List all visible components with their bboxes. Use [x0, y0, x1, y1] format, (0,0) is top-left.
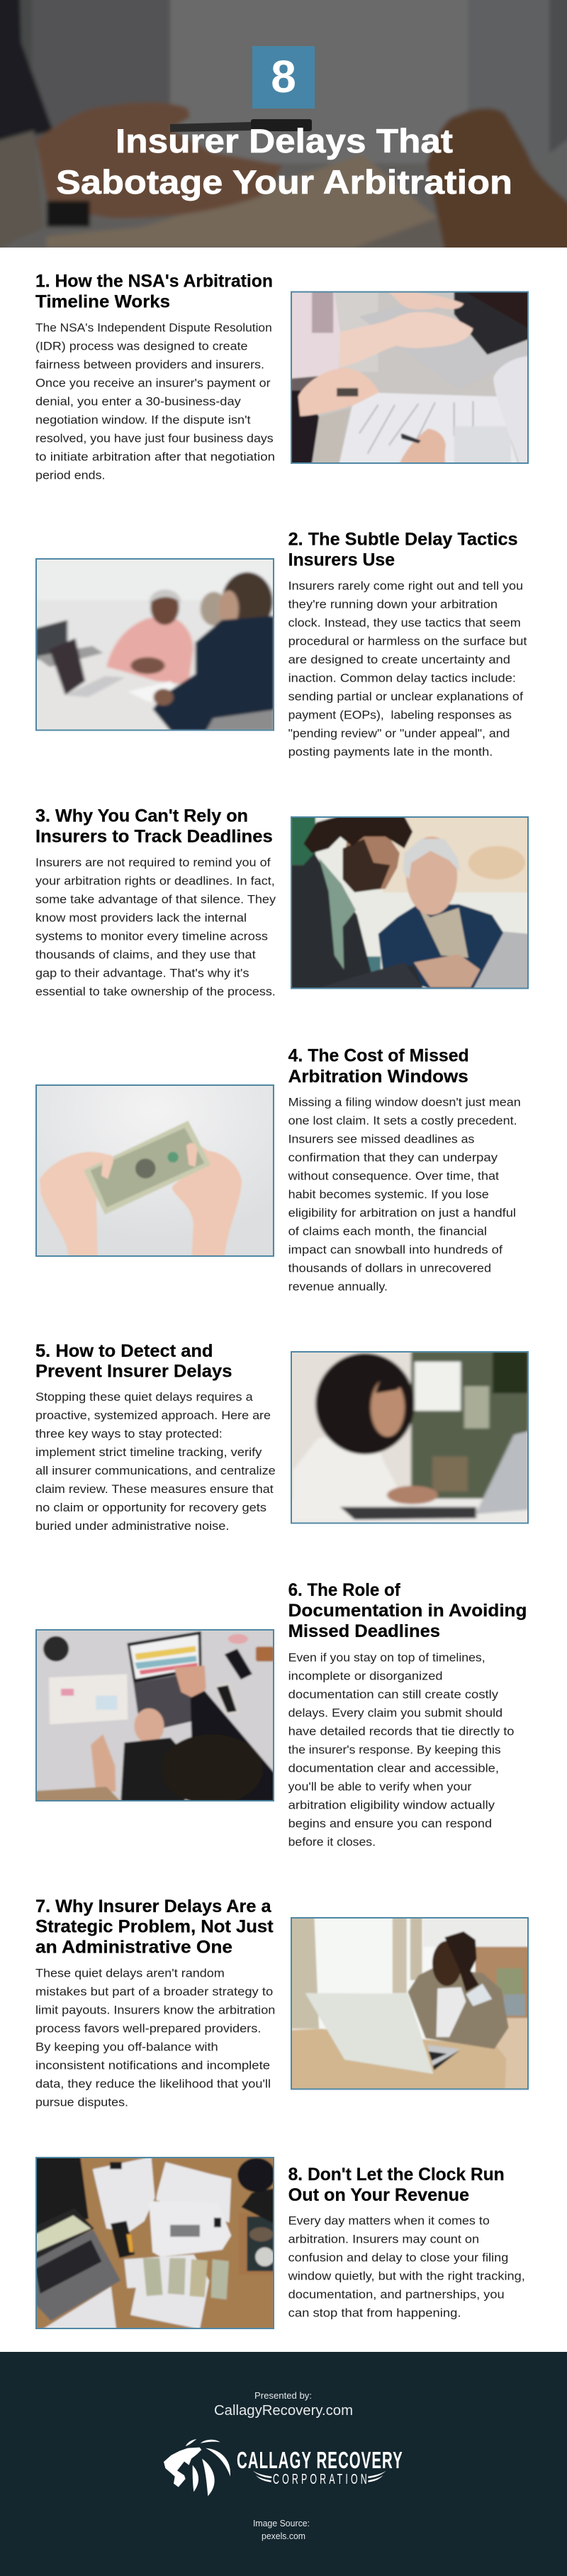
body text 4 — [288, 1097, 521, 1294]
heading 6: 6. The Role of — [288, 1580, 400, 1600]
body text 8 — [287, 2215, 525, 2320]
title — [56, 122, 512, 201]
section 6 — [35, 1580, 527, 1848]
body text 7: data, they reduce the likelihood that you'll — [35, 2077, 271, 2090]
body text 8: can stop that from happening. — [288, 2307, 461, 2320]
body text 7: limit payouts. Insurers know the arbitration — [35, 2004, 275, 2016]
body text 6: documentation clear and accessible, — [288, 1762, 499, 1775]
logo: Callagy Recovery Corporation — [164, 2439, 403, 2496]
body text 5: Stopping these quiet delays requires a — [35, 1391, 254, 1404]
section 5 — [35, 1341, 529, 1533]
body text 7 — [35, 1967, 275, 2109]
heading 8: Out on Your Revenue — [288, 2185, 469, 2205]
heading 4 — [288, 1045, 469, 1087]
photo: overhead view of a desk with a laptop — [35, 1629, 274, 1801]
body text 2: payment (EOPs), labeling responses as — [288, 709, 512, 722]
footer — [0, 2352, 567, 2576]
image source: Image Source: — [253, 2519, 310, 2528]
body text 6: delays. Every claim you submit should — [288, 1706, 503, 1719]
heading 2 — [288, 529, 518, 570]
photo: stressed man at a laptop — [291, 1917, 529, 2089]
body text 7: process favors well-prepared providers. — [35, 2022, 261, 2035]
body text 6 — [288, 1651, 515, 1848]
body text 5: claim review. These measures ensure that — [35, 1483, 274, 1496]
body text 3: systems to monitor every timeline across — [35, 930, 268, 943]
photo: desk with papers, money, calculator and laptop — [35, 2157, 274, 2329]
heading 1: 1. How the NSA's Arbitration — [35, 271, 273, 291]
body text 3: thousands of claims, and they use that — [35, 948, 256, 961]
logo wings — [253, 2470, 386, 2482]
body text 8: window quietly, but with the right tracking, — [287, 2270, 525, 2283]
body text 2: posting payments late in the month. — [288, 746, 493, 759]
body text 2: Insurers rarely come right out and tell you — [288, 580, 523, 593]
body text 1: Once you receive an insurer's payment or — [35, 377, 271, 389]
body text 8: confusion and delay to close your filing — [288, 2252, 508, 2265]
heading 4: Arbitration Windows — [288, 1067, 468, 1087]
heading 6: Documentation in Avoiding — [288, 1601, 527, 1621]
body text 1: resolved, you have just four business days — [35, 432, 274, 445]
body text 2: procedural or harmless on the surface but — [288, 635, 527, 648]
body text 1: denial, you enter a 30-business-day — [35, 395, 242, 408]
body text 3: know most providers lack the internal — [35, 911, 247, 924]
number badge — [252, 46, 315, 109]
body text 5: buried under administrative noise. — [35, 1520, 230, 1533]
body text 6: the insurer's response. By keeping this — [288, 1743, 501, 1756]
presented by: Presented by: — [254, 2390, 312, 2401]
heading 3: 3. Why You Can't Rely on — [35, 806, 248, 826]
body text 4: one lost claim. It sets a costly precedent. — [288, 1115, 517, 1128]
logo subtitle: CORPORATION — [273, 2471, 367, 2487]
body text 6: documentation can still create costly — [288, 1688, 499, 1701]
body text 3: essential to take ownership of the process. — [35, 985, 276, 998]
body text 6: Even if you stay on top of timelines, — [288, 1651, 485, 1664]
section 7 — [35, 1897, 529, 2109]
body text 6: arbitration eligibility window actually — [288, 1799, 495, 1811]
logo wordmark: CALLAGY RECOVERY — [237, 2447, 403, 2473]
heading 1 — [35, 271, 273, 312]
body text 6: you'll be able to verify when your — [288, 1780, 472, 1793]
section 1 — [35, 271, 529, 482]
body text 5: no claim or opportunity for recovery gets — [35, 1501, 266, 1514]
body text 4: of claims each month, the financial — [288, 1226, 487, 1238]
heading 7: an Administrative One — [35, 1938, 232, 1958]
section 3 — [35, 806, 529, 998]
body text 3: gap to their advantage. That's why it's — [35, 967, 249, 979]
heading 8: 8. Don't Let the Clock Run — [288, 2165, 505, 2184]
heading 3: Insurers to Track Deadlines — [35, 827, 273, 847]
body text 1: negotiation window. If the dispute isn't — [35, 413, 251, 426]
body text 7: These quiet delays aren't random — [35, 1967, 225, 1980]
body text 4: revenue annually. — [288, 1281, 388, 1294]
heading 5: Prevent Insurer Delays — [35, 1362, 232, 1382]
hero banner — [0, 0, 567, 255]
image source: pexels.com — [262, 2531, 305, 2541]
photo: meeting around a table — [35, 558, 274, 731]
heading 7: 7. Why Insurer Delays Are a — [35, 1897, 272, 1916]
heading 2: Insurers Use — [288, 550, 395, 570]
body text 2: sending partial or unclear explanations of — [288, 691, 523, 704]
body text 1: to initiate arbitration after that negotiation — [35, 450, 275, 463]
website: CallagyRecovery.com — [214, 2403, 353, 2419]
heading 5 — [35, 1341, 232, 1382]
body text 4: confirmation that they can underpay — [288, 1152, 498, 1165]
body text 7: By keeping you off-balance with — [35, 2041, 218, 2053]
hero background photo: handing over a pen across a desk — [0, 0, 567, 248]
body text 3: your arbitration rights or deadlines. In fact, — [35, 875, 275, 887]
heading 6 — [288, 1580, 527, 1641]
body text 5: all insurer communications, and centralize — [35, 1465, 276, 1477]
body text 4: habit becomes systemic. If you lose — [288, 1189, 489, 1201]
body text 7: mistakes but part of a broader strategy to — [35, 1985, 273, 1998]
body text 4: eligibility for arbitration on just a handful — [288, 1207, 516, 1220]
body text 2 — [288, 580, 527, 759]
photo: woman working on a laptop — [291, 1351, 529, 1523]
section 2 — [35, 529, 527, 759]
body text 1: fairness between providers and insurers. — [35, 358, 264, 371]
body text 2: are designed to create uncertainty and — [288, 654, 510, 667]
body text 3: Insurers are not required to remind you of — [35, 856, 271, 869]
body text 1 — [35, 321, 275, 482]
body text 2: clock. Instead, they use tactics that seem — [288, 617, 521, 630]
heading 7 — [35, 1897, 274, 1958]
body text 7: inconsistent notifications and incomplete — [35, 2059, 270, 2072]
title: Sabotage Your Arbitration — [56, 163, 512, 201]
heading 5: 5. How to Detect and — [35, 1341, 213, 1361]
body text 7: pursue disputes. — [35, 2096, 128, 2109]
body text 1: period ends. — [35, 469, 105, 482]
body text 4: without consequence. Over time, that — [288, 1170, 499, 1183]
title: Insurer Delays That — [116, 122, 453, 160]
body text 6: have detailed records that tie directly to — [288, 1725, 515, 1738]
body text 4: impact can snowball into hundreds of — [288, 1244, 503, 1257]
body text 1: (IDR) process was designed to create — [35, 340, 248, 352]
body text 8: documentation, and partnerships, you — [288, 2289, 505, 2302]
section 4 — [35, 1045, 521, 1294]
body text 3 — [35, 856, 276, 998]
body text 2: "pending review" or "under appeal", and — [288, 728, 510, 740]
body text 5: three key ways to stay protected: — [35, 1428, 223, 1440]
photo: two men looking at a laptop — [291, 816, 529, 989]
photo: hands on laptop and paperwork — [291, 291, 529, 464]
heading 4: 4. The Cost of Missed — [288, 1045, 469, 1065]
body text 4: Insurers see missed deadlines as — [288, 1133, 474, 1146]
body text 1: The NSA's Independent Dispute Resolution — [35, 321, 272, 334]
body text 5: implement strict timeline tracking, verify — [35, 1446, 262, 1459]
body text 6: before it closes. — [288, 1836, 376, 1848]
heading 7: Strategic Problem, Not Just — [35, 1916, 274, 1936]
body text 8: arbitration. Insurers may count on — [288, 2233, 479, 2246]
heading 2: 2. The Subtle Delay Tactics — [288, 529, 518, 549]
section 8 — [35, 2157, 525, 2329]
body text 4: Missing a filing window doesn't just mean — [288, 1097, 521, 1109]
body text 3: some take advantage of that silence. They — [35, 893, 276, 906]
image source — [253, 2519, 310, 2541]
heading 3 — [35, 806, 273, 847]
heading 1: Timeline Works — [35, 292, 170, 312]
icon: lion head — [164, 2439, 230, 2496]
body text 5: proactive, systemized approach. Here are — [35, 1409, 271, 1422]
number badge: 8 — [271, 51, 296, 102]
heading 6: Missed Deadlines — [288, 1621, 440, 1641]
body text 4: thousands of dollars in unrecovered — [288, 1262, 491, 1275]
photo: hands holding a dollar bill — [35, 1084, 274, 1257]
body text 6: incomplete or disorganized — [288, 1670, 442, 1682]
body text 8: Every day matters when it comes to — [288, 2215, 490, 2228]
body text 2: they're running down your arbitration — [288, 599, 498, 611]
body text 2: inaction. Common delay tactics include: — [288, 672, 516, 685]
body text 5 — [35, 1391, 276, 1533]
heading 8 — [288, 2165, 505, 2205]
body text 6: begins and ensure you can respond — [288, 1817, 492, 1830]
